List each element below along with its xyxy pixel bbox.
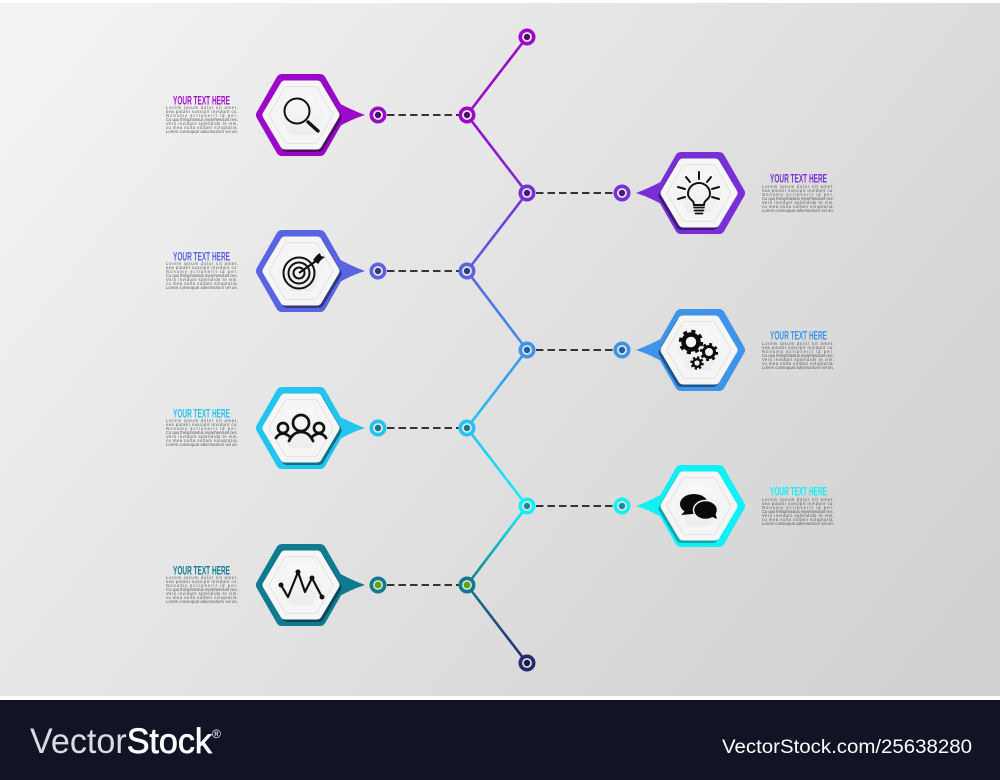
text block 1: YOUR TEXT HERE (173, 96, 230, 108)
text block 3 (166, 408, 238, 447)
text block 1: Lorem consequat adversarium vel an. (166, 129, 238, 134)
text block 7: Lorem ipsum dolor sit amet, (762, 497, 834, 502)
icon: people (276, 415, 326, 441)
text block 6: Cu quo theophrastus reprehendunt nec. (762, 353, 834, 358)
text block 3: Cu quo theophrastus reprehendunt nec. (166, 430, 238, 435)
text block 3: Lorem consequat adversarium vel an. (166, 442, 238, 447)
watermark band (0, 700, 1000, 780)
text block 3: Lorem ipsum dolor sit amet, (166, 418, 238, 423)
text block 5: Cu quo theophrastus reprehendunt nec. (762, 196, 834, 201)
icon: target (284, 253, 325, 288)
text block 5: Nonumy scripserit id per. (762, 192, 834, 197)
text block 6: YOUR TEXT HERE (770, 330, 827, 342)
icon: gears (680, 332, 717, 369)
hexagon: zigzag chart (262, 550, 365, 620)
text block 2: Vero invidunt splendide te vim, (166, 277, 238, 282)
text block 2: Lorem consequat adversarium vel an. (166, 285, 238, 290)
hexagon: people (262, 393, 365, 463)
text block 3: YOUR TEXT HERE (173, 408, 230, 420)
text block 4: YOUR TEXT HERE (173, 566, 230, 578)
text block 5: Lorem consequat adversarium vel an. (762, 208, 834, 213)
text block 6: Lorem ipsum dolor sit amet, (762, 341, 834, 346)
text block 1: sea putant suscipit invidunt cu. (166, 109, 238, 114)
text block 1 (166, 96, 238, 134)
text block 1: Cu quo theophrastus reprehendunt nec. (166, 117, 238, 122)
hexagon: chat bubbles (636, 471, 739, 541)
text block 2: YOUR TEXT HERE (173, 252, 230, 264)
text block 3: Nonumy scripserit id per. (166, 426, 238, 431)
dashed connectors (387, 115, 614, 585)
text block 3: sea putant suscipit invidunt cu. (166, 422, 238, 427)
text block 6: Lorem consequat adversarium vel an. (762, 365, 834, 370)
text block 4: cu mea nulla nullam voluptaria. (166, 595, 238, 600)
text block 2: sea putant suscipit invidunt cu. (166, 265, 238, 270)
text block 3: Vero invidunt splendide te vim, (166, 434, 238, 439)
text block 2: Cu quo theophrastus reprehendunt nec. (166, 273, 238, 278)
text block 4: Lorem consequat adversarium vel an. (166, 599, 238, 604)
text block 2: Nonumy scripserit id per. (166, 269, 238, 274)
watermark logo: VectorStock (30, 722, 212, 761)
watermark registered mark: ® (212, 727, 221, 741)
text block 7: sea putant suscipit invidunt cu. (762, 501, 834, 506)
text block 7: cu mea nulla nullam voluptaria. (762, 517, 834, 522)
text block 1: Vero invidunt splendide te vim, (166, 121, 238, 126)
text block 2: Lorem ipsum dolor sit amet, (166, 261, 238, 266)
text block 5: cu mea nulla nullam voluptaria. (762, 204, 834, 209)
text block 3: cu mea nulla nullam voluptaria. (166, 438, 238, 443)
text block 4: sea putant suscipit invidunt cu. (166, 579, 238, 584)
text block 7: Nonumy scripserit id per. (762, 505, 834, 510)
text block 5: YOUR TEXT HERE (770, 174, 827, 186)
icon: light bulb (678, 172, 719, 214)
text block 4: Nonumy scripserit id per. (166, 583, 238, 588)
text block 5: sea putant suscipit invidunt cu. (762, 188, 834, 193)
text block 6: sea putant suscipit invidunt cu. (762, 345, 834, 350)
watermark id: VectorStock.com/25638280 (722, 736, 972, 758)
hexagon: target (262, 236, 365, 306)
icon: zigzag chart (278, 570, 324, 600)
text block 7: YOUR TEXT HERE (770, 486, 827, 498)
hexagon: magnifier (262, 80, 365, 150)
hexagon: gears (636, 315, 739, 385)
text block 7: Vero invidunt splendide te vim, (762, 513, 834, 518)
icon: chat bubbles (680, 494, 718, 520)
text block 1: Nonumy scripserit id per. (166, 113, 238, 118)
text block 6: Vero invidunt splendide te vim, (762, 357, 834, 362)
text block 7: Cu quo theophrastus reprehendunt nec. (762, 509, 834, 514)
text block 4 (166, 566, 238, 604)
timeline nodes (371, 30, 629, 670)
text block 4: Vero invidunt splendide te vim, (166, 591, 238, 596)
text block 2: cu mea nulla nullam voluptaria. (166, 281, 238, 286)
text block 6 (762, 330, 834, 370)
text block 1: cu mea nulla nullam voluptaria. (166, 125, 238, 130)
central branching line (467, 37, 527, 663)
text block 5: Lorem ipsum dolor sit amet, (762, 184, 834, 189)
hexagon: light bulb (636, 158, 739, 228)
text block 5 (762, 174, 834, 213)
text block 6: cu mea nulla nullam voluptaria. (762, 361, 834, 366)
text block 4: Lorem ipsum dolor sit amet, (166, 575, 238, 580)
text block 7: Lorem consequat adversarium vel an. (762, 521, 834, 526)
text block 1: Lorem ipsum dolor sit amet, (166, 105, 238, 110)
text block 7 (762, 486, 834, 526)
text block 5: Vero invidunt splendide te vim, (762, 200, 834, 205)
text block 2 (166, 252, 238, 290)
text block 4: Cu quo theophrastus reprehendunt nec. (166, 587, 238, 592)
icon: magnifier (284, 98, 318, 131)
text block 6: Nonumy scripserit id per. (762, 349, 834, 354)
